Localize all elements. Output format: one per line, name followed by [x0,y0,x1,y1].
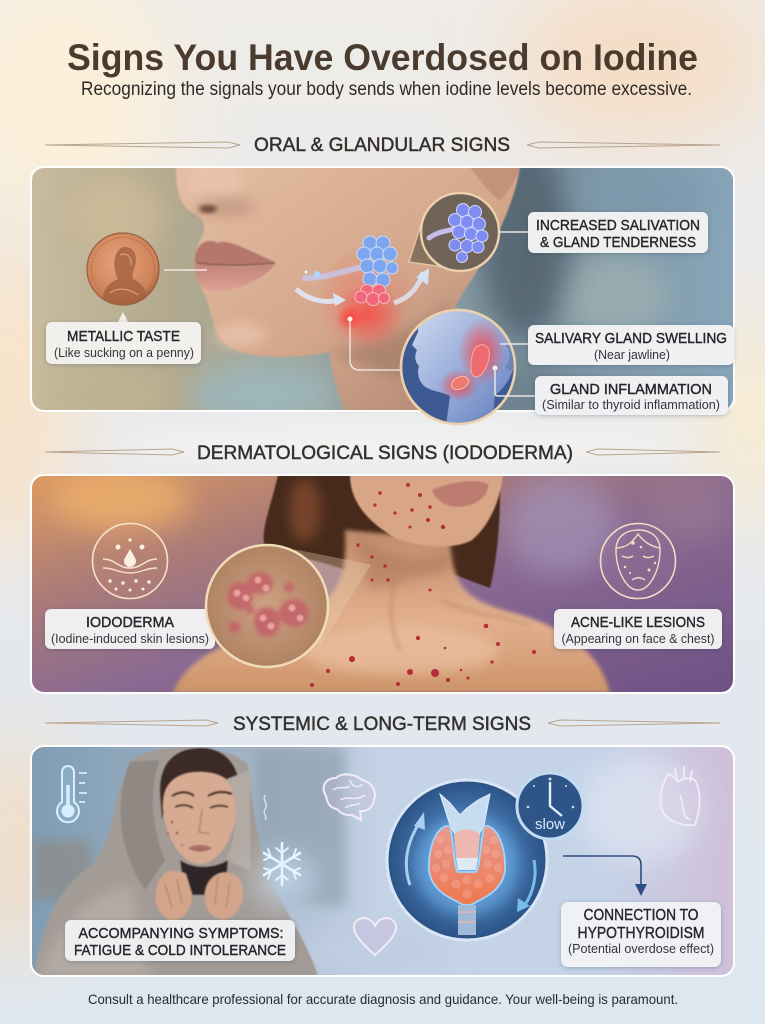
section heading: systemic [45,714,720,735]
icon: heart outline [354,918,396,955]
icon: wavy lines [264,795,266,820]
icon: snowflake [264,843,300,885]
panel: systemic signs [31,746,734,976]
label: salivary gland swelling: (Near jawline) [594,347,670,362]
icon: slow clock: slow [535,816,565,833]
icon: skin layer [92,524,168,598]
label: accompanying symptoms: FATIGUE & COLD INTOLERANCE [74,942,286,959]
icon: slow clock [517,773,583,839]
label: gland inflammation [535,376,728,415]
label: increased salivation: INCREASED SALIVATION [536,217,700,234]
icon: face with acne [600,524,676,598]
connector: jaw to head [337,305,400,370]
illustration: lesions [310,483,536,687]
arrow: out of gland [394,268,429,303]
label: increased salivation [528,212,708,253]
arrow: to hypothyroidism [563,856,647,896]
illustration: lips [195,241,275,291]
section heading: oral and glandular: ORAL & GLANDULAR SIGNS [254,135,510,156]
label: salivary gland swelling [528,325,734,365]
connector: swelling [500,343,528,345]
icon: head profile with inflamed gland [401,304,518,426]
label: acne-like lesions: ACNE-LIKE LESIONS [571,614,705,631]
illustration: woman in blanket [35,747,318,976]
icon: thermometer [57,766,87,822]
connector: salivation [499,231,528,233]
label: metallic taste [46,312,201,364]
label: metallic taste: METALLIC TASTE [67,328,180,345]
illustration: neck and shoulders [173,530,610,693]
section heading: systemic: SYSTEMIC & LONG-TERM SIGNS [233,714,531,735]
label: iododerma: IODODERMA [86,614,174,631]
label: accompanying symptoms: ACCOMPANYING SYMPTOMS: [78,925,284,942]
illustration: lips [432,481,488,507]
label: connection to hypothyroidism: CONNECTION TO [584,907,698,924]
callout: gland magnified [409,193,499,271]
label: connection to hypothyroidism: (Potential overdose effect) [568,941,714,956]
icon: gland cluster on jaw [302,236,404,344]
subtitle: Recognizing the signals your body sends when iodine levels become excessive. [81,79,692,100]
label: gland inflammation: (Similar to thyroid inflammation) [542,397,720,412]
section heading: dermatological: DERMATOLOGICAL SIGNS (IODODERMA) [197,443,573,464]
illustration: hair [264,475,500,588]
panel: oral and glandular signs [30,166,736,426]
label: gland inflammation: GLAND INFLAMMATION [550,381,712,398]
icon: penny coin [87,233,159,305]
label: iododerma: (Iodine-induced skin lesions) [51,631,209,646]
label: acne-like lesions [554,609,722,649]
label: connection to hypothyroidism: HYPOTHYROIDISM [578,925,704,942]
section heading: dermatological [45,443,720,464]
arrow: into gland [296,289,346,306]
label: metallic taste: (Like sucking on a penny) [54,345,194,360]
illustration: chin [350,475,503,547]
label: salivary gland swelling: SALIVARY GLAND SWELLING [535,330,727,347]
label: increased salivation: & GLAND TENDERNESS [540,234,696,251]
footer note: Consult a healthcare professional for accurate diagnosis and guidance. Your well-being is paramount. [88,991,678,1007]
connector: inflammation [492,366,535,396]
label: connection to hypothyroidism [561,902,721,967]
section heading: oral and glandular [45,135,720,156]
connector: coin to lips [164,269,207,271]
title: Signs You Have Overdosed on Iodine [67,37,698,78]
callout: magnified skin lesions [206,545,370,667]
panel: dermatological signs [31,470,734,693]
icon: thyroid gland [387,780,547,940]
label: acne-like lesions: (Appearing on face & chest) [562,631,714,646]
label: iododerma [45,609,215,649]
icon: brain [324,774,375,820]
label: accompanying symptoms [65,920,295,961]
icon: anatomical heart [660,766,700,825]
illustration: lower face [176,158,520,411]
